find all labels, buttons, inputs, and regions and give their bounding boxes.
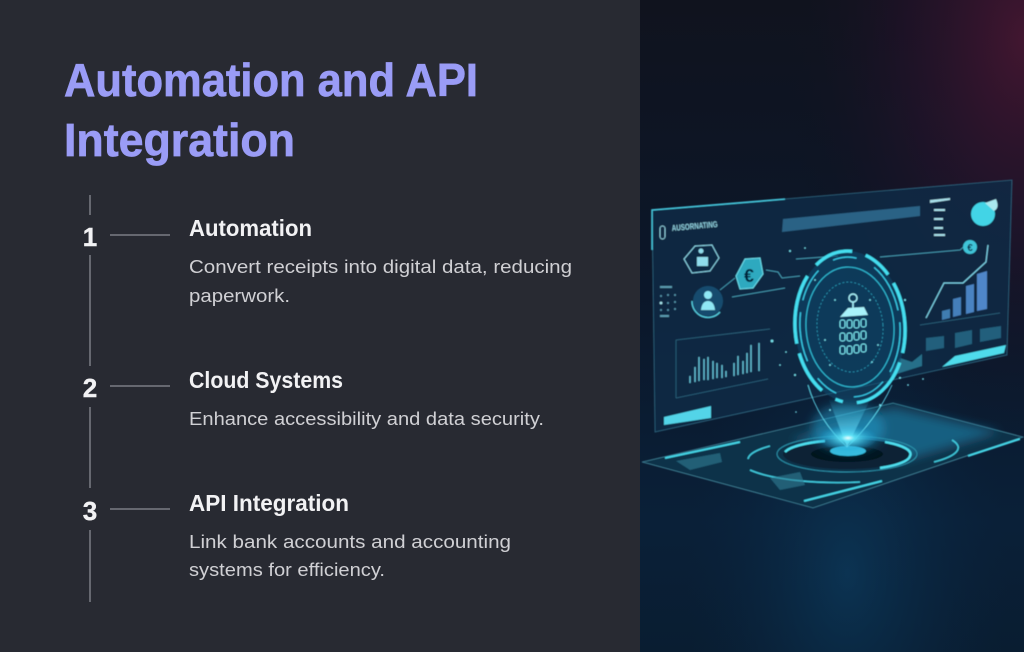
step 2: cloud systems: Enhance accessibility and data security. bbox=[189, 409, 544, 429]
title: Integration bbox=[64, 114, 295, 166]
left panel background bbox=[0, 0, 640, 652]
title bbox=[64, 54, 478, 166]
platform plate bbox=[642, 403, 1023, 508]
icon: euro hexagon: € bbox=[744, 266, 754, 286]
step 2: cloud systems bbox=[83, 367, 544, 429]
particles bbox=[771, 247, 924, 413]
sidebar list bbox=[930, 198, 950, 236]
bar chart: lower left bbox=[676, 329, 770, 398]
step 1: automation bbox=[83, 215, 572, 306]
step 3: api integration bbox=[83, 490, 511, 580]
timeline rail bbox=[89, 195, 91, 602]
step 2: cloud systems: Cloud Systems bbox=[189, 367, 343, 393]
step 1: automation: Automation bbox=[189, 215, 312, 241]
small dots legend bbox=[660, 286, 676, 317]
step 1: automation: Convert receipts into digital data, reducing bbox=[189, 257, 572, 277]
step 1: automation: 1 bbox=[83, 222, 97, 252]
location pin hologram bbox=[771, 247, 924, 452]
faint skyline behind ring bbox=[890, 354, 922, 376]
screen label: AUSORNATING bbox=[671, 219, 718, 233]
icon: user circle bbox=[692, 286, 723, 317]
icon: euro coin: € bbox=[967, 243, 973, 254]
icon: euro hexagon bbox=[736, 258, 763, 289]
bar chart: upper right with trend line bbox=[920, 245, 1000, 325]
step 3: api integration: 3 bbox=[83, 496, 97, 526]
step 3: api integration: API Integration bbox=[189, 490, 349, 516]
icon: person hexagon bbox=[684, 245, 719, 273]
step 2: cloud systems: 2 bbox=[83, 373, 97, 403]
pie chart bbox=[971, 199, 998, 226]
connector lines bbox=[720, 243, 968, 297]
highlight button right bbox=[942, 345, 1006, 367]
panel: hologram illustration bbox=[640, 0, 1024, 652]
title: Automation and API bbox=[64, 54, 478, 106]
step 1: automation: paperwork. bbox=[189, 286, 290, 306]
step 3: api integration: systems for efficiency. bbox=[189, 560, 385, 580]
icon: euro coin bbox=[963, 240, 977, 254]
holographic dashboard screen bbox=[652, 180, 1012, 432]
lower right blocks bbox=[926, 326, 1001, 351]
step 3: api integration: Link bank accounts and accounting bbox=[189, 532, 511, 552]
highlight button bbox=[664, 406, 711, 425]
icon: pin glyph and grid bbox=[840, 294, 868, 354]
search bar bbox=[782, 206, 920, 232]
